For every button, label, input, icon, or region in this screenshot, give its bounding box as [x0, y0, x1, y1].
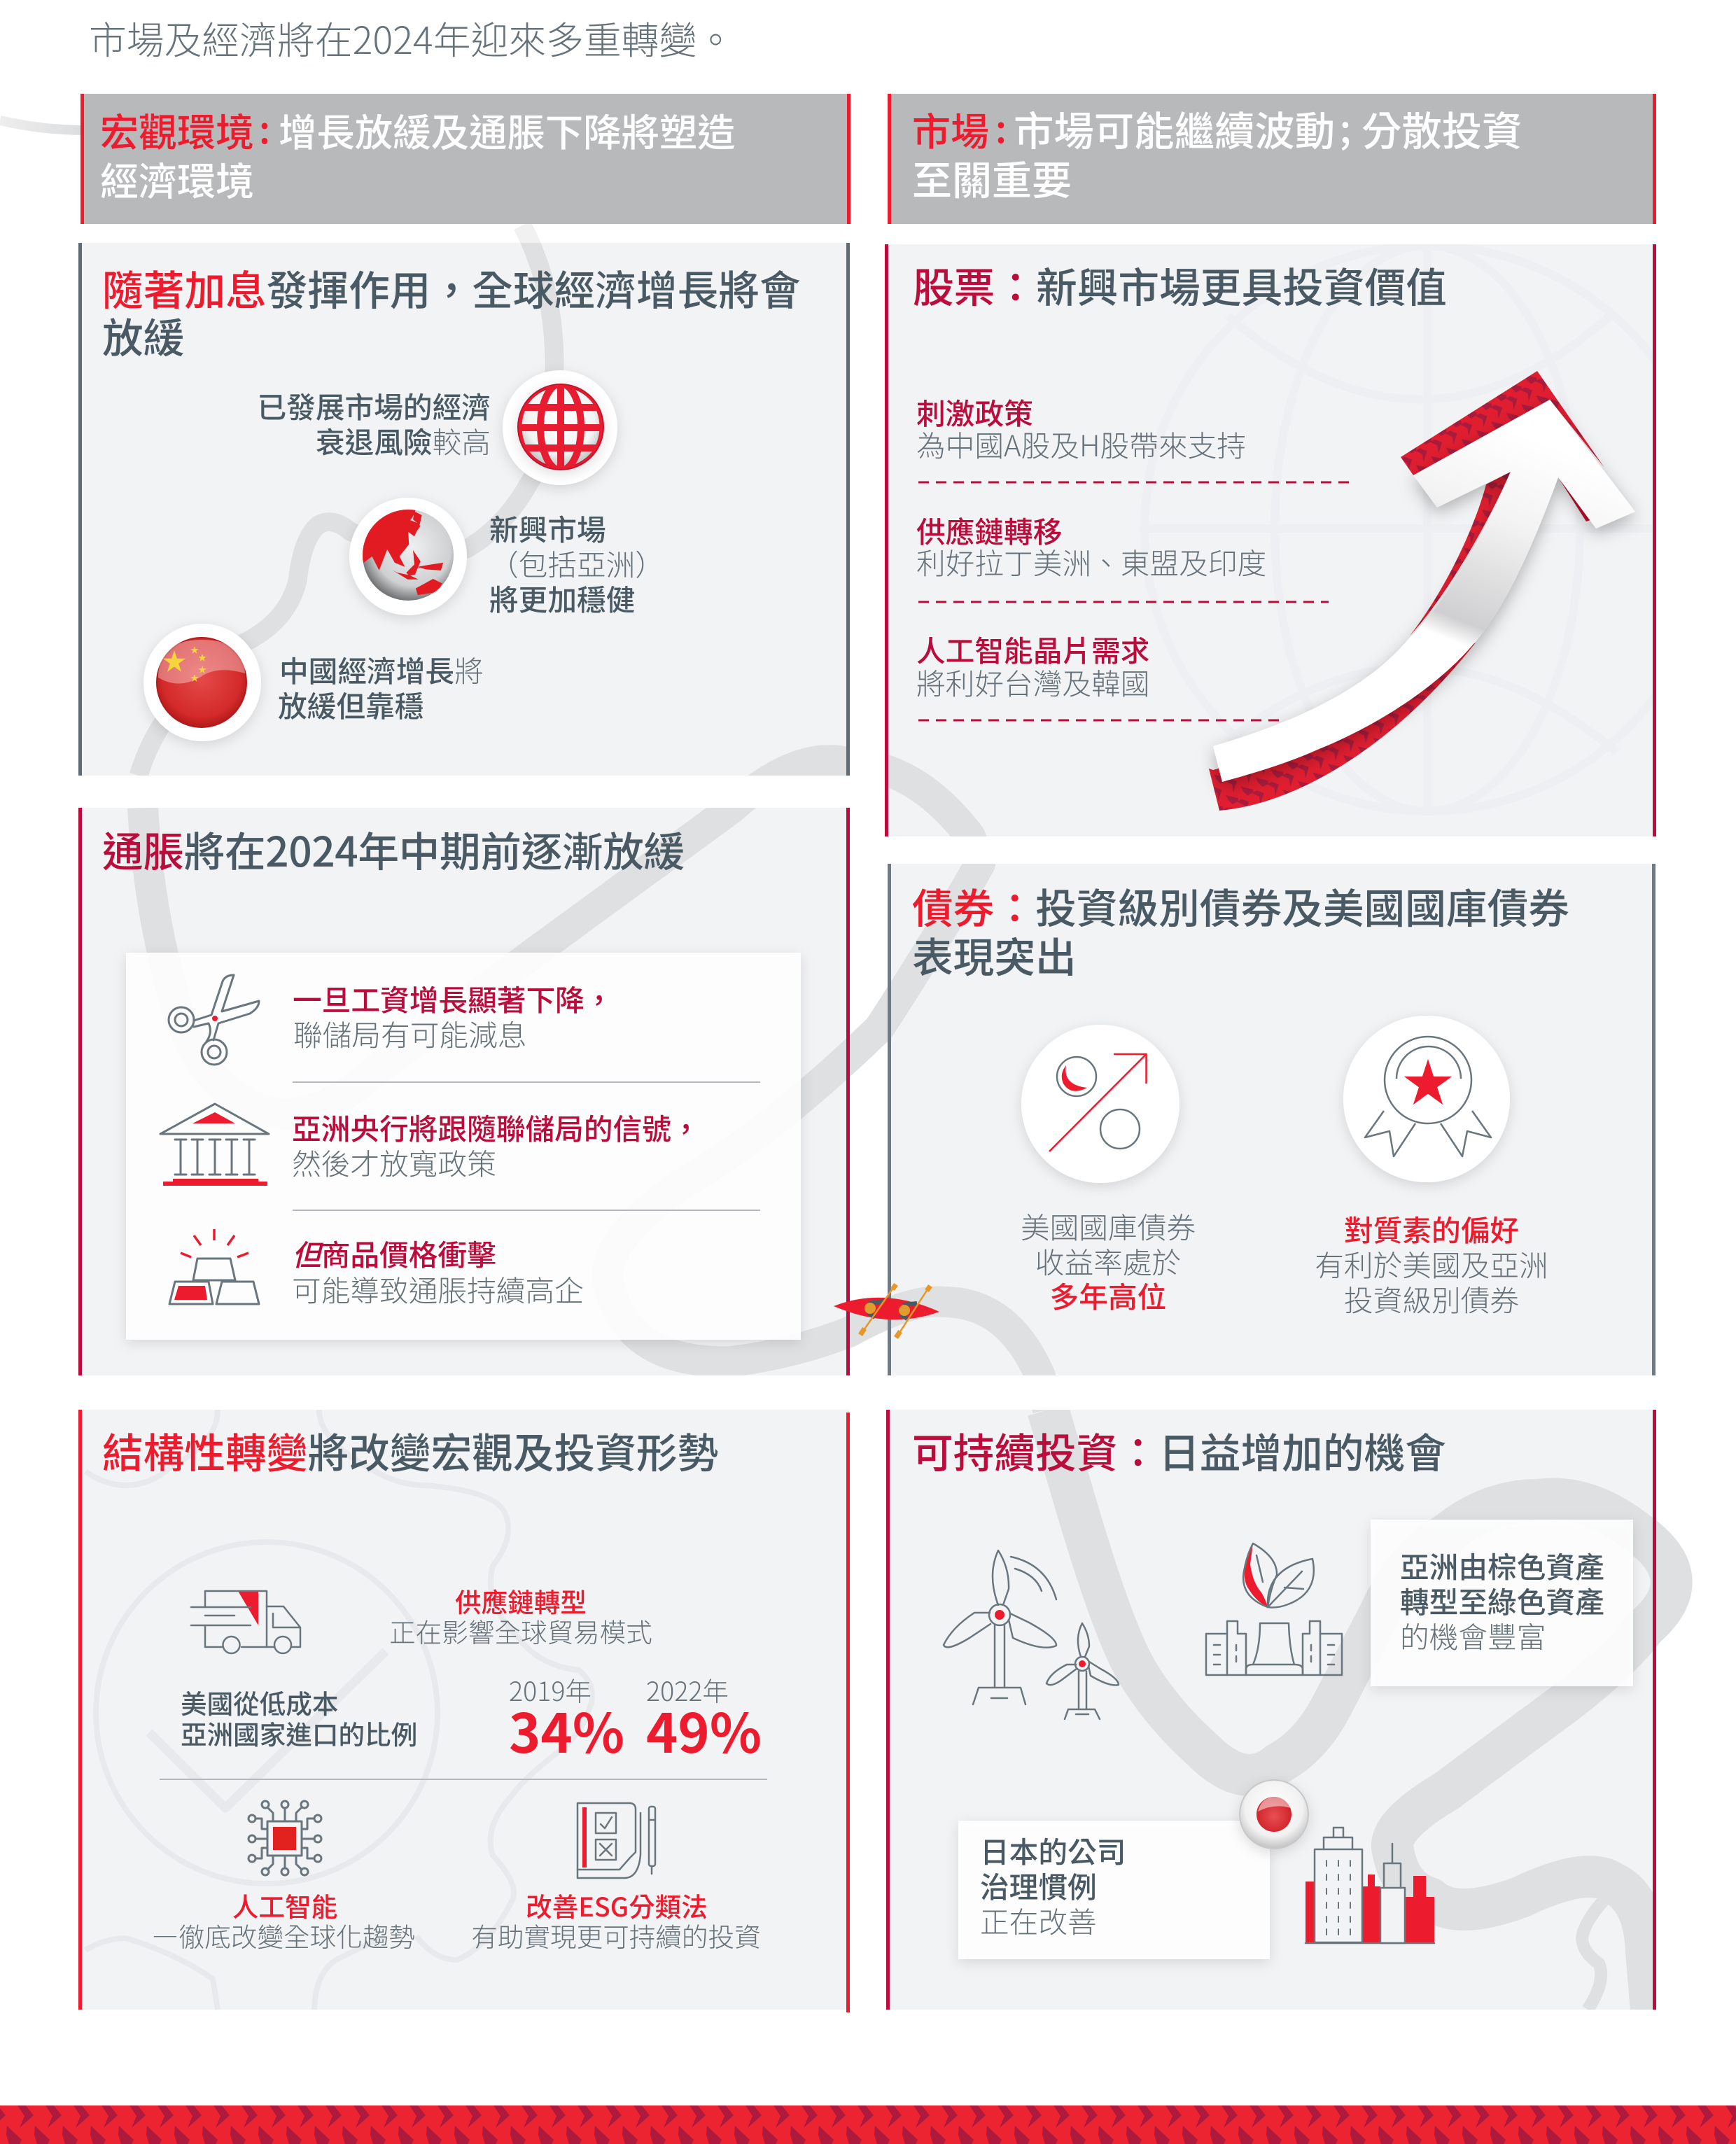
header: macro environment: 經濟環境 [100, 150, 254, 206]
text: ai: 人工智能 [232, 1886, 337, 1924]
text: quality preference: 投資級別債券 [1344, 1278, 1519, 1320]
icon: leaves and power plant [1206, 1543, 1342, 1675]
text: quality preference: 對質素的偏好 [1344, 1208, 1519, 1250]
icon: central bank [160, 1104, 269, 1186]
icon: award ribbon [1343, 1016, 1510, 1182]
text: china: 放緩但靠穩 [278, 684, 424, 726]
header: markets: : [995, 98, 1007, 154]
text: esg taxonomy [471, 1886, 761, 1954]
list: stimulus [916, 391, 1349, 482]
text: supply chain transformation [389, 1581, 652, 1650]
list: ai chips [916, 629, 1281, 720]
text: asian central banks [292, 1107, 701, 1184]
text: wages [293, 978, 614, 1055]
icon: small wind turbine [1046, 1623, 1119, 1719]
icon: red grid globe [503, 370, 617, 485]
text: ai [152, 1886, 415, 1954]
icon: japan sphere [1240, 1780, 1308, 1849]
stat: 2019: 2019年 [509, 1670, 592, 1709]
text: emerging markets: （包括亞洲） [489, 542, 664, 584]
icon: city skyline [1306, 1828, 1434, 1943]
arrow: rising ribbon [1209, 371, 1635, 811]
list: stimulus: 為中國A股及H股帶來支持 [916, 423, 1246, 465]
icon: percent up [1021, 1025, 1180, 1183]
text: quality preference [1315, 1208, 1548, 1320]
heading: inflation: 通脹將在2024年中期前逐漸放緩 [102, 819, 685, 878]
text: commodities: 可能導致通脹持續高企 [292, 1268, 584, 1310]
text: emerging markets: 將更加穩健 [489, 577, 635, 619]
card: inflation drivers [126, 953, 801, 1340]
text: emerging markets [489, 507, 664, 619]
list: ai chips: 人工智能晶片需求 [916, 629, 1149, 671]
header: markets: 市場 [912, 101, 989, 157]
icon: scissors [169, 975, 259, 1065]
text: treasury yields [1021, 1205, 1196, 1317]
text: china: 中國經濟增長將 [279, 649, 484, 691]
icon: esg checklist [578, 1803, 655, 1878]
card: brown to green [1371, 1520, 1633, 1686]
text: emerging markets: 新興市場 [489, 507, 606, 549]
header: markets: ; [1340, 98, 1351, 154]
faint map and check background in structural panel [85, 1410, 592, 2010]
icon: kayak [834, 1284, 939, 1338]
header: macro environment: 增長放緩及通脹下降將塑造 [279, 102, 736, 157]
panel backgrounds [78, 243, 1656, 2010]
text: commodities: 但商品價格衝擊 [292, 1233, 496, 1275]
panel border strokes [78, 243, 1656, 2012]
card: brown to green: 的機會豐富 [1400, 1615, 1546, 1657]
footer chevron band [0, 2106, 1736, 2144]
header: markets: 至關重要 [912, 149, 1072, 206]
text: supply chain transformation: 供應鏈轉型 [455, 1581, 587, 1620]
heading: global growth: 隨著加息發揮作用，全球經濟增長將會 [102, 258, 801, 317]
heading: equities: 股票：新興市場更具投資價值 [913, 255, 1447, 314]
heading: structural shifts: 結構性轉變將改變宏觀及投資形勢 [102, 1420, 718, 1480]
card: brown to green: 亞洲由棕色資產 [1400, 1545, 1604, 1587]
header: macro environment: 宏觀環境 [100, 101, 254, 157]
card: brown to green: 轉型至綠色資產 [1400, 1580, 1604, 1622]
text: supply chain transformation: 正在影響全球貿易模式 [389, 1611, 652, 1650]
list: ai chips: 將利好台灣及韓國 [916, 661, 1149, 703]
panel: equities [913, 255, 1635, 811]
header: macro environment: : [259, 99, 270, 155]
stat: 2019: 34% [509, 1691, 624, 1769]
text: wages: 聯儲局有可能減息 [293, 1013, 526, 1055]
text: wages: 一旦工資增長顯著下降， [293, 978, 614, 1020]
header: markets: 分散投資 [1362, 99, 1522, 157]
panel: inflation [102, 819, 801, 1340]
icon: gold bars [169, 1229, 259, 1304]
text: asian central banks: 然後才放寬政策 [292, 1142, 496, 1184]
text: asian central banks: 亞洲央行將跟隨聯儲局的信號， [292, 1107, 701, 1149]
heading: bonds: 表現突出 [912, 925, 1077, 984]
card: japan governance [958, 1821, 1270, 1959]
text: us import share: 美國從低成本 [181, 1683, 338, 1721]
panel: structural shifts [102, 1420, 767, 1954]
text: treasury yields: 美國國庫債券 [1021, 1205, 1196, 1247]
text: commodities [292, 1233, 584, 1310]
list: supply chain: 利好拉丁美洲、東盟及印度 [916, 541, 1266, 583]
card: japan governance: 正在改善 [980, 1900, 1097, 1942]
text: developed markets: 衰退風險較高 [316, 420, 491, 462]
card: japan governance: 日本的公司 [980, 1830, 1126, 1872]
header: markets [888, 94, 1656, 224]
text: us import share [181, 1683, 417, 1752]
faint globe background in equities panel [1144, 245, 1710, 812]
list: supply chain [916, 510, 1329, 602]
text: developed markets: 已發展市場的經濟 [258, 385, 491, 427]
text: treasury yields: 收益率處於 [1035, 1240, 1181, 1282]
icon: asia globe [349, 498, 467, 615]
heading: global growth: 放緩 [102, 305, 184, 365]
intro line: 市場及經濟將在2024年迎來多重轉變。 [89, 11, 734, 65]
stat: 2022: 49% [646, 1691, 762, 1769]
panel: global growth [102, 258, 801, 741]
text: treasury yields: 多年高位 [1050, 1275, 1166, 1317]
panel: sustainable investing [912, 1420, 1633, 1959]
icon: truck [191, 1591, 300, 1653]
panel: bonds [912, 876, 1569, 1320]
icon: china flag sphere [144, 624, 261, 741]
heading: sustainable investing: 可持續投資：日益增加的機會 [912, 1420, 1446, 1480]
icon: ai chip [248, 1801, 321, 1875]
card: japan governance: 治理慣例 [980, 1865, 1097, 1907]
text: china [278, 649, 484, 726]
list: stimulus: 刺激政策 [916, 391, 1033, 433]
list: supply chain: 供應鏈轉移 [916, 510, 1062, 552]
text: us import share: 亞洲國家進口的比例 [181, 1714, 417, 1752]
header: markets: 市場可能繼續波動 [1014, 99, 1335, 157]
text: esg taxonomy: 改善ESG分類法 [526, 1886, 708, 1924]
text: quality preference: 有利於美國及亞洲 [1315, 1243, 1548, 1285]
stat: 2022: 2022年 [646, 1670, 729, 1709]
text: ai: —徹底改變全球化趨勢 [152, 1916, 415, 1954]
header: macro environment [80, 94, 850, 224]
icon: large wind turbine [944, 1550, 1056, 1704]
text: developed markets [258, 385, 491, 462]
text: esg taxonomy: 有助實現更可持續的投資 [471, 1916, 761, 1954]
heading: bonds: 債券：投資級別債券及美國國庫債券 [912, 876, 1569, 935]
